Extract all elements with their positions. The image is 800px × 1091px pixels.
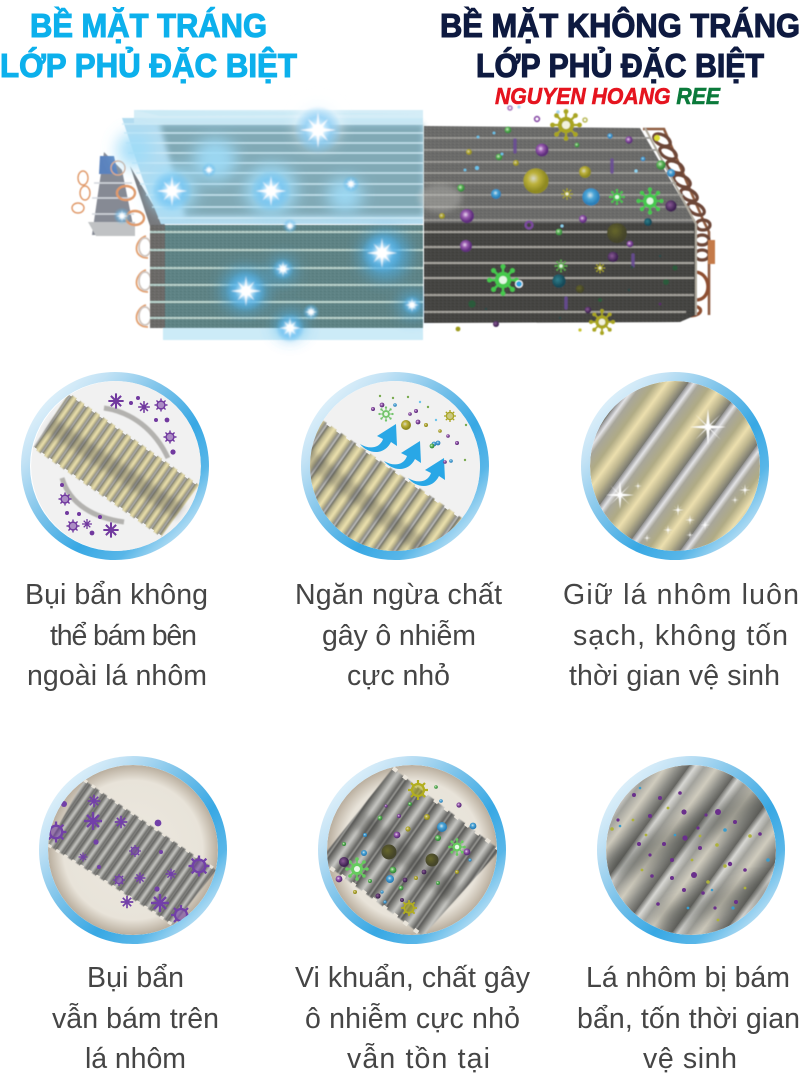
- copper cap: [708, 240, 715, 264]
- copper loops: [136, 236, 151, 327]
- caption: column 1 row 2: vẫn bám trên: [52, 1003, 219, 1035]
- copper tubes: [643, 129, 710, 316]
- caption: column 1 row 1: ngoài lá nhôm: [27, 660, 207, 692]
- heading: coated surface: BỀ MẶT TRÁNG: [30, 7, 267, 44]
- fin close-up: [46, 765, 218, 935]
- ring frame: [39, 756, 227, 944]
- glass overlay: [134, 110, 423, 340]
- caption: column 3 row 2: Lá nhôm bị bám: [586, 962, 790, 994]
- caption: column 1 row 1: Bụi bẩn không: [25, 579, 208, 611]
- coil: coated half: [72, 105, 424, 342]
- caption: column 2 row 2: vẫn tồn tại: [347, 1043, 490, 1075]
- coil: uncoated half: [418, 105, 715, 335]
- back coil section: [72, 152, 144, 236]
- heading: coated surface: [0, 7, 297, 84]
- panel: coated, clean aluminium fin: [581, 372, 769, 560]
- grey fins under glass: [130, 166, 165, 327]
- watermark: NGUYEN HOANG REE: [495, 83, 721, 109]
- caption: column 3 row 1: sạch, không tốn: [573, 620, 788, 652]
- caption: column 3 row 1: thời gian vệ sinh: [569, 660, 780, 692]
- caption: column 3 row 2: vệ sinh: [643, 1043, 737, 1075]
- caption: column 1 row 1: thể bám bên: [50, 620, 197, 652]
- ring frame: [597, 756, 785, 944]
- blue arrows: [360, 424, 445, 486]
- teal shade upper: [160, 124, 423, 216]
- purple germs: [46, 795, 210, 925]
- panel: coated, dust cannot stick: [21, 372, 209, 560]
- pollutant dots: [371, 395, 467, 464]
- grime dots: [616, 791, 762, 910]
- caption: column 3 row 1: [563, 579, 799, 692]
- ring frame: [21, 372, 209, 560]
- sparkles: [114, 106, 422, 342]
- pale highlight: [418, 184, 462, 212]
- heading: coated surface: LỚP PHỦ ĐẶC BIỆT: [0, 47, 297, 84]
- caption: column 3 row 2: bẩn, tốn thời gian: [577, 1003, 800, 1035]
- fin block upper: [424, 126, 696, 224]
- caption: column 1 row 2: Bụi bẩn: [87, 962, 184, 994]
- shine sparkles: [606, 409, 751, 542]
- panel: uncoated, bacteria remain: [318, 756, 506, 944]
- ring frame: [301, 372, 489, 560]
- caption: column 2 row 2: Vi khuẩn, chất gây: [295, 962, 531, 994]
- fin close-up: [31, 381, 201, 551]
- panel: uncoated, dust remains: [39, 756, 227, 944]
- caption: column 2 row 2: [295, 962, 531, 1075]
- heading: uncoated surface: [440, 6, 800, 84]
- fin block blue upper: [122, 118, 423, 224]
- caption: column 1 row 2: lá nhôm: [85, 1043, 186, 1075]
- caption: column 2 row 1: gây ô nhiễm: [322, 620, 476, 652]
- caption: column 2 row 1: Ngăn ngừa chất: [295, 579, 502, 611]
- panel: uncoated, dirty aluminium fin: [597, 756, 785, 944]
- purple germs: [58, 393, 176, 538]
- heading: uncoated surface: LỚP PHỦ ĐẶC BIỆT: [476, 47, 764, 84]
- coil illustration: [72, 105, 715, 342]
- fin stripes: [122, 124, 423, 218]
- caption: column 3 row 2: [577, 962, 800, 1075]
- pollutant particles: [439, 105, 678, 332]
- germs: [487, 109, 664, 335]
- fin close-up: [606, 765, 776, 935]
- fin close-up: [320, 765, 500, 936]
- dust smudges: [104, 408, 168, 458]
- caption: column 2 row 1: cực nhỏ: [347, 660, 450, 692]
- fin close-up: [590, 381, 760, 551]
- blue glow patches: [223, 231, 424, 339]
- fin close-up: [310, 381, 480, 551]
- fin block lower: [424, 223, 696, 323]
- pollutants: [336, 780, 476, 916]
- ring frame: [581, 372, 769, 560]
- fin block teal lower: [150, 225, 423, 328]
- ring frame: [318, 756, 506, 944]
- caption: column 1 row 2: [52, 962, 219, 1075]
- metal fin stripes: [424, 138, 695, 220]
- caption: column 2 row 2: ô nhiễm cực nhỏ: [305, 1003, 520, 1035]
- caption: column 3 row 1: Giữ lá nhôm luôn: [563, 579, 799, 611]
- caption: column 1 row 1: [25, 579, 208, 692]
- panel: coated, prevents tiny pollutants: [301, 372, 489, 560]
- caption: column 2 row 1: [295, 579, 502, 692]
